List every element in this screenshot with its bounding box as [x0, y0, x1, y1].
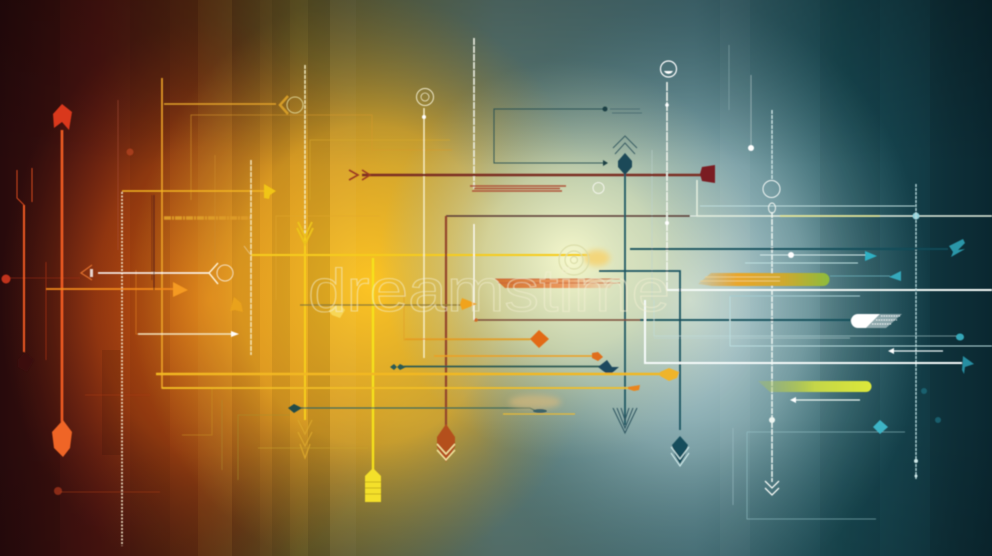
- white vertical with circle: [416, 88, 434, 358]
- orange line with small arrow: [434, 352, 603, 361]
- left red arrow small: [17, 168, 34, 372]
- yellow vertical arrow: [365, 258, 381, 502]
- white vertical top circle: [660, 61, 697, 290]
- white dashed vertical with circles right: [748, 110, 780, 495]
- dark teal vertical with chevrons: [613, 136, 637, 433]
- top orange arrow and circle: [164, 96, 303, 114]
- long white horizontal right: [667, 289, 992, 291]
- watermark outline text: dreamstime: [308, 257, 670, 324]
- orange vertical line with yellow branch: [162, 78, 210, 388]
- teal line top with zigzag arrow: [630, 239, 965, 257]
- white line centre: [473, 224, 475, 320]
- long yellow horizontal line: [244, 246, 610, 266]
- white small left arrow: [888, 348, 943, 354]
- centre spiral circle: [559, 245, 589, 275]
- lime gradient bar: [758, 381, 872, 392]
- yellow arrow branch: [122, 184, 276, 199]
- small orange chevron marks: [230, 297, 345, 318]
- pale box with cyan dot: [654, 296, 992, 346]
- small faint dots: [54, 388, 941, 495]
- dashed bar near top-left: [164, 216, 250, 220]
- white L line with cyan arrow: [645, 300, 974, 374]
- striped bar top: [470, 186, 566, 191]
- red to teal long horizontal: [474, 318, 853, 322]
- white bullet bar with hatching: [851, 314, 902, 328]
- white vertical dotted line left: [121, 192, 123, 546]
- teal arrow line with double ends: [390, 360, 619, 374]
- cyan small arrow: [830, 271, 901, 281]
- small circle: [593, 182, 604, 194]
- faint thin connector lines: [3, 45, 905, 519]
- top box connector: [494, 106, 642, 166]
- left red arrow tall: [52, 104, 72, 457]
- white arrow small: [138, 331, 239, 337]
- orange diamond with line: [405, 330, 549, 348]
- red-teal line with bottom arrowhead: [437, 216, 860, 462]
- white arrow with circle: [2, 148, 233, 284]
- tall yellow vertical with arrow: [297, 65, 313, 458]
- salmon striped bar: [495, 279, 620, 288]
- white dashed vertical: [250, 160, 252, 355]
- second yellow horizontal: [162, 385, 640, 391]
- dark line with small arrow: [288, 395, 575, 414]
- dark teal box line: [599, 271, 689, 466]
- dashed vertical far right: [914, 184, 918, 480]
- white left arrow lime: [790, 397, 860, 403]
- white box top right with yellow line: [697, 180, 992, 220]
- long yellow horizontal arrow: [156, 368, 679, 381]
- white dashed top vertical: [473, 38, 475, 190]
- orange arrow lower left: [46, 282, 188, 297]
- dark vertical with node: [153, 195, 155, 290]
- orange-green gradient bar: [698, 273, 830, 286]
- orange arrow line centre: [300, 298, 477, 310]
- cyan diamond bottom right: [873, 420, 888, 434]
- dark red arrow: [349, 165, 715, 183]
- white node line with cyan arrow: [745, 251, 877, 263]
